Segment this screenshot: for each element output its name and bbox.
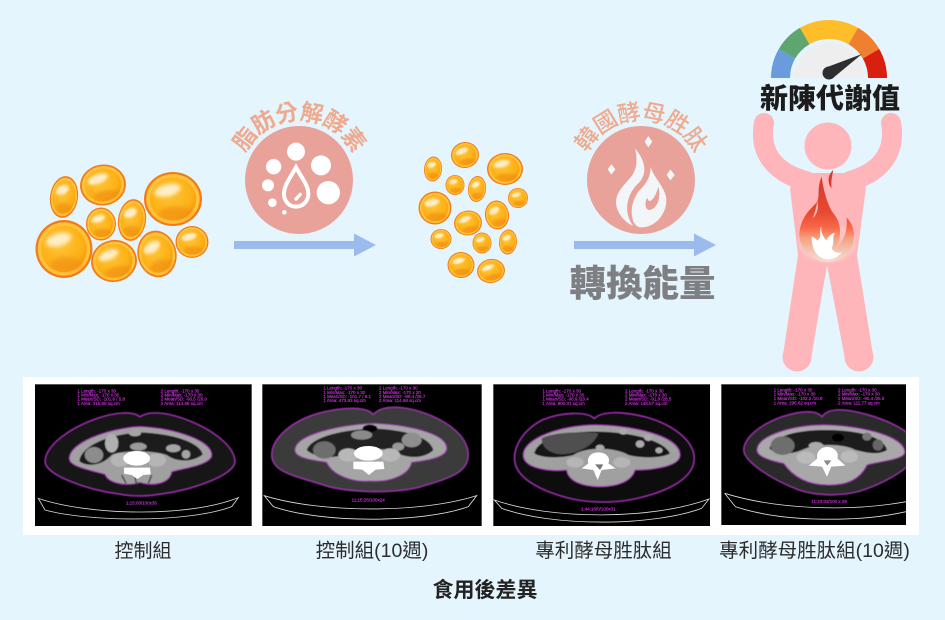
label: lipase: 脂肪分解酵素 [230,100,368,153]
CT scan: yeast peptide group 10 weeks: 2 Mean/SD: -90.4 /25.5 [838,396,885,401]
CT scan: yeast peptide group 10 weeks: 2 Min/Max: -170 x 30 [838,392,880,397]
CT scan: control group: 2 Length: -170 x 30 [161,388,200,393]
CT scan: yeast peptide group 10 weeks: 11:23:03/100 x 29 [811,499,847,504]
CT scan: yeast peptide group: 1 Length: -170 x 30 [542,388,581,393]
fat cells: large group [36,161,208,286]
CT scan: control group 10 weeks: 2 Area: 114.68 sq.cm [379,398,421,403]
arrow: lipase [234,234,376,256]
CT scan: yeast peptide group 10 weeks: 1 Mean/SD: -102.2 /10.8 [774,396,823,401]
heading: convert energy: 轉換能量 [570,263,716,304]
CT scan: control group: 2 Mean/SD: -90.5 /26.0 [161,397,208,402]
label: yeast peptide: 韓國酵母胜肽 [573,101,708,153]
arrow: energy conversion [574,234,716,256]
CT scan: yeast peptide group 10 weeks: 2 Length: -170 x 30 [838,388,877,393]
icon: yeast peptide circle with flame [587,126,695,234]
CT scan: control group: 2 Area: 114.68 sq.cm [161,401,203,406]
figure: person [763,122,892,372]
gauge needle [822,54,862,80]
CT scan: yeast peptide group: 1 Area: 800.31 sq.cm [542,401,585,406]
CT scan: yeast peptide group: 2 Min/Max: -170 x 30 [625,393,667,398]
icon: belly flame [798,170,857,263]
CT scan: control group: 1 Area: 315.60 sq.cm [77,401,120,406]
CT scan: control group 10 weeks: 2 Length: -170 x 30 [379,386,418,391]
CT scan: control group: 1 Mean/SD: -101.6 / 5.8 [77,397,125,402]
CT scan: control group [35,384,252,526]
CT scan: control group 10 weeks: 1 Min/Max: -170 x 30 [323,390,366,395]
fat cells: shrunken group [418,140,528,285]
CT scan: control group 10 weeks: 1 Length: -170 x 30 [323,386,362,391]
caption: control 10 weeks: 控制組(10週) [316,540,428,562]
gauge [771,20,887,80]
CT scan: control group 10 weeks: 1 Mean/SD: -101.7 / 9.1 [323,394,371,399]
CT scan: yeast peptide group 10 weeks: 1 Min/Max: -170 x 30 [774,392,816,397]
CT scan: yeast peptide group: 2 Area: 145.57 sq.cm [625,401,668,406]
CT scan: control group: 2 Min/Max: -170 x 30 [161,393,203,398]
CT scan: yeast peptide group [493,384,710,526]
heading: metabolism: 新陳代謝值 [760,82,900,114]
CT scan: control group 10 weeks: 11:15:26/100x24 [352,498,385,503]
CT scan: control group: 1 Length: -170 x 30 [77,388,116,393]
CT scan: yeast peptide group 10 weeks: 2 Area: 111.77 sq.cm [838,400,880,405]
CT scan: yeast peptide group 10 weeks: 1 Area: 295.62 sq.cm [774,400,816,405]
CT scan: yeast peptide group: 1 Mean/SD: -96.9 /20.4 [542,397,589,402]
CT scan: control group: 1:15:00/100x35 [126,500,157,505]
CT scan: yeast peptide group: 1:44:16/0/100x31 [581,507,616,512]
CT scan: yeast peptide group: 2 Length: -170 x 30 [625,388,664,393]
caption: difference after consumption: 食用後差異 [432,578,538,602]
panel: CT scans [23,377,919,535]
CT scan: yeast peptide group: 1 Min/Max: -170 x 30 [542,393,585,398]
CT scan: control group 10 weeks [262,384,482,526]
CT scan: control group: 1 Min/Max: -170 x 30 [77,393,120,398]
CT scan: yeast peptide group 10 weeks: 1 Length: -170 x 30 [774,388,813,393]
icon: lipase circle with drop [245,126,353,234]
CT scan: control group 10 weeks: 2 Mean/SD: -89.4 /26.7 [379,394,426,399]
caption: peptide 10 weeks: 專利酵母胜肽組(10週) [719,540,910,562]
caption: control: 控制組 [114,540,172,562]
CT scan: control group 10 weeks: 2 Min/Max: -170 x 30 [379,390,421,395]
CT scan: yeast peptide group: 2 Mean/SD: -91.8 /28.5 [625,397,672,402]
CT scan: control group 10 weeks: 1 Area: 473.93 sq.cm [323,398,366,403]
CT scan: yeast peptide group 10 weeks [721,384,919,525]
caption: peptide: 專利酵母胜肽組 [535,540,672,562]
